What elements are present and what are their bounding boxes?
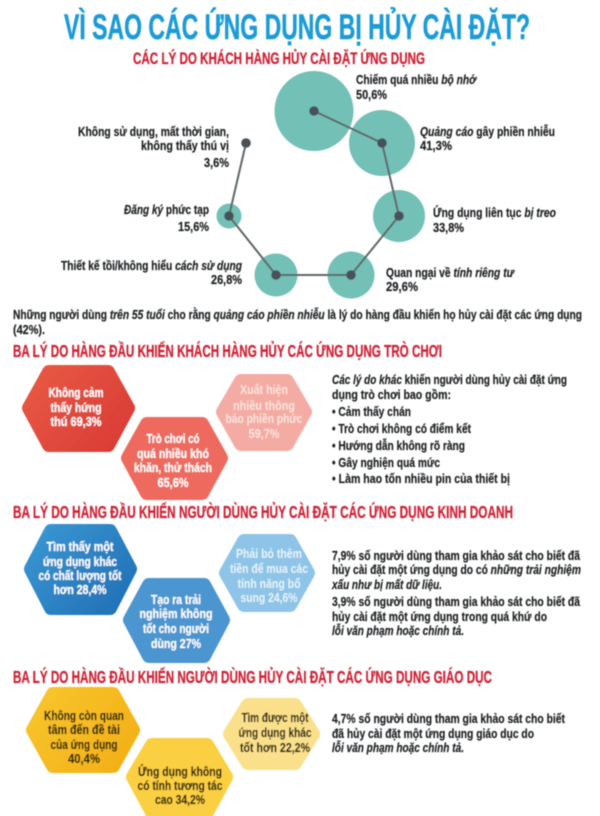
hexagon: difficult game 65,6%: [128, 424, 221, 493]
label: freezing 33,8%: Ứng dụng liên tục bị treo: [433, 205, 556, 220]
hexagon: not interested 69,3%: Không cảm: [48, 385, 104, 400]
bubble chart: uninstall reasons: [216, 71, 425, 298]
label: complex signup 15,6%: 15,6%: [178, 219, 209, 234]
label: not used 3,6%: không thấy thú vị: [141, 138, 229, 153]
hexagon: lost interest 40,4%: 40,4%: [68, 751, 100, 766]
text block: other game reasons: • Làm hao tốn nhiều pin của thiết bị: [332, 471, 510, 486]
text block: education note: [332, 711, 566, 755]
text block: business notes: hủy cài đặt một ứng dụng trong quá khứ do: [332, 609, 547, 624]
label: freezing 33,8%: [433, 205, 556, 235]
hexagon: annoying notifications 59,7%: Xuất hiện: [240, 382, 288, 397]
label: not used 3,6%: 3,6%: [204, 155, 229, 170]
label: poor design 26,8%: [61, 258, 242, 287]
hexagon: low interactivity 34,2%: [133, 745, 226, 812]
hexagon: found better 22,2%: ứng dụng khác: [238, 725, 312, 740]
hexagon: low interactivity 34,2%: có tính tương tác: [138, 778, 222, 793]
hexagon: better app 28,4%: [31, 531, 130, 608]
hexagon: not interested 69,3%: thấy hứng: [50, 400, 102, 415]
hexagon: found better 22,2%: Tìm được một: [242, 710, 309, 725]
hexagon: difficult game 65,6%: quá nhiều khó: [137, 446, 209, 461]
heading: reasons for uninstalling: CÁC LÝ DO KHÁCH HÀNG HỦY CÀI ĐẶT ỨNG DỤNG: [133, 49, 425, 68]
text block: other game reasons: • Gây nghiện quá mức: [332, 455, 440, 470]
label: complex signup 15,6%: [124, 202, 209, 234]
hexagon: extra payment 24,6%: tiền để mua các: [230, 561, 308, 576]
hexagon: extra payment 24,6%: tính năng bổ: [238, 576, 301, 591]
hexagon: difficult game 65,6%: 65,6%: [158, 475, 189, 490]
hexagon: annoying notifications 59,7%: 59,7%: [248, 426, 280, 441]
text block: other game reasons: • Trò chơi không có điểm kết: [332, 421, 472, 436]
hexagon: annoying notifications 59,7%: báo phiền phức: [226, 411, 302, 426]
text block: other game reasons: • Hướng dẫn không rõ ràng: [332, 438, 465, 453]
hexagon: lost interest 40,4%: [33, 694, 133, 766]
hexagon: found better 22,2%: [230, 705, 313, 763]
text block: education note: đã hủy cài đặt một ứng dụng giáo dục do: [332, 726, 534, 741]
hexagon: difficult game 65,6%: khăn, thử thách: [134, 460, 212, 475]
label: poor design 26,8%: Thiết kế tồi/không hiểu cách sử dụng: [61, 258, 242, 273]
hexagon: extra payment 24,6%: [226, 541, 308, 605]
hexagon: better app 28,4%: có chất lượng tốt: [38, 568, 122, 583]
hexagon: low interactivity 34,2%: cao 34,2%: [155, 792, 205, 807]
hexagon: lost interest 40,4%: của ứng dụng: [50, 737, 118, 752]
hexagon: bad experience 27%: Tạo ra trải: [151, 592, 201, 607]
hexagon: extra payment 24,6%: sung 24,6%: [240, 590, 298, 605]
text block: education note: lỗi văn phạm hoặc chính tả.: [332, 740, 464, 755]
hexagon: better app 28,4%: hơn 28,4%: [54, 582, 107, 597]
hexagon: bad experience 27%: [130, 585, 223, 656]
hexagon: lost interest 40,4%: Không còn quan: [44, 708, 124, 723]
hexagon: bad experience 27%: tốt cho người: [143, 621, 209, 636]
text block: business notes: xấu như bị mất dữ liệu.: [331, 577, 442, 592]
text block: other game reasons: [332, 372, 567, 486]
text block: users over 55: (42%).: [13, 322, 45, 337]
hexagon: extra payment 24,6%: Phải bỏ thêm: [236, 546, 302, 561]
label: memory 50,6%: [356, 72, 477, 102]
label: poor design 26,8%: 26,8%: [211, 272, 242, 287]
hexagon: low interactivity 34,2%: Ứng dụng không: [138, 764, 222, 779]
text block: users over 55: [13, 307, 582, 337]
label: privacy 29,6%: [386, 265, 515, 294]
text block: other game reasons: dụng trò chơi bao gồm:: [332, 387, 451, 402]
label: memory 50,6%: Chiếm quá nhiều bộ nhớ: [356, 72, 477, 87]
label: ads 41,3%: 41,3%: [420, 138, 452, 153]
label: not used 3,6%: Không sử dụng, mất thời gian,: [78, 124, 229, 139]
label: privacy 29,6%: Quan ngại về tính riêng tư: [386, 265, 515, 280]
hexagon: better app 28,4%: Tìm thấy một: [46, 539, 114, 554]
label: complex signup 15,6%: Đăng ký phức tạp: [124, 202, 209, 217]
hexagon: annoying notifications 59,7%: nhiều thông: [233, 398, 295, 413]
hexagon: better app 28,4%: ứng dụng khác: [43, 554, 117, 569]
hexagon: not interested 69,3%: thú 69,3%: [50, 414, 102, 429]
text block: business notes: lỗi văn phạm hoặc chính tả.: [332, 623, 464, 638]
hexagon: bad experience 27%: nghiệm không: [140, 606, 213, 621]
label: ads 41,3%: [420, 124, 555, 153]
label: not used 3,6%: [78, 124, 229, 170]
hexagon: annoying notifications 59,7%: [223, 381, 305, 444]
label: freezing 33,8%: 33,8%: [433, 220, 464, 235]
hexagon: not interested 69,3%: [29, 372, 128, 445]
text block: business notes: hủy cài đặt một ứng dụng do có những trải nghiệm: [332, 562, 581, 577]
label: ads 41,3%: Quảng cáo gây phiền nhiễu: [420, 124, 555, 139]
hexagon: lost interest 40,4%: tâm đến đề tài: [48, 722, 120, 737]
hexagon: bad experience 27%: dùng 27%: [151, 636, 201, 651]
label: memory 50,6%: 50,6%: [356, 87, 387, 102]
hexagon: difficult game 65,6%: Trò chơi có: [146, 431, 200, 446]
label: privacy 29,6%: 29,6%: [386, 279, 418, 294]
hexagon: found better 22,2%: tốt hơn 22,2%: [240, 740, 310, 755]
text block: other game reasons: • Cảm thấy chán: [332, 404, 411, 419]
text block: business notes: [331, 548, 581, 638]
